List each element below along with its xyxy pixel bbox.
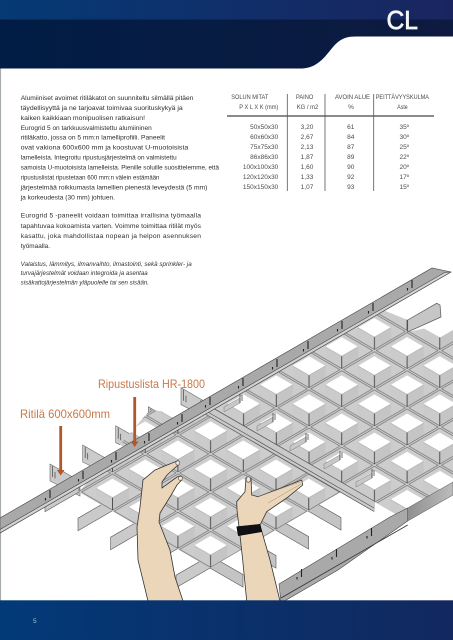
italic note: turvajärjestelmät voidaan integroida ja asentaa [21, 271, 148, 277]
table header: SOLUN MITAT [231, 94, 268, 101]
second paragraph: Eurogrid 5 -paneelit voidaan toimittaa irrallisina työmaalla [21, 213, 201, 220]
table rows: 120x120x30 [243, 174, 279, 181]
table rows: 1,33 [301, 174, 314, 181]
table rows: 20º [399, 164, 410, 171]
upper grid panel [212, 310, 453, 521]
header banner [0, 0, 453, 69]
italic note: sisäkattojärjestelmän yläpuolelle tai sen sisään. [21, 280, 149, 286]
table rows: 84 [347, 134, 355, 141]
table header [231, 93, 430, 111]
table rows: 30º [399, 134, 410, 141]
intro text block: täydellisyyttä ja ne tarjoavat toimivaa suorituskykyä ja [21, 105, 183, 112]
label: grid: Ritilä 600x600mm [20, 407, 110, 421]
lower grid panel [79, 410, 341, 568]
italic note [21, 262, 192, 286]
table rows: 35º [399, 124, 410, 131]
free lamella at top right [408, 303, 441, 332]
intro text block: Alumiiniset avoimet ritiläkatot on suunniteltu silmällä pitäen [21, 95, 194, 102]
icon: wristband [237, 524, 262, 536]
lower suspension rail [279, 508, 408, 603]
table header: P X L X K (mm) [239, 104, 278, 111]
table rows: 2,13 [301, 144, 314, 151]
table header: PEITTÄVYYSKULMA [376, 93, 430, 101]
panel seam strip [200, 400, 374, 512]
table header: AVOIN ALUE [335, 94, 371, 101]
table rows: 61 [347, 124, 355, 131]
lamella ends above rail [50, 388, 211, 496]
second paragraph: tapahtuvaa kokoamista varten. Voimme toimittaa ritilät myös [21, 223, 202, 230]
hanging clips in upper panel [224, 394, 374, 487]
table header: Aste [397, 104, 408, 111]
table rows: 1,87 [301, 154, 314, 161]
table rows: 1,07 [301, 184, 314, 191]
table rows: 150x150x30 [243, 184, 279, 191]
header code CL: CL [386, 5, 418, 35]
intro text block: ja korkeudesta (30 mm) johtuen. [20, 194, 115, 201]
second paragraph: kasattu, joka mahdollistaa nopean ja helpon asennuksen [21, 233, 201, 240]
intro text block: ripustuslistat ripustetaan 600 mm:n välein estämään [21, 174, 160, 181]
table rows: 87 [347, 144, 355, 151]
intro text block: järjestelmää roikkumasta lamellien pienestä leveydestä (5 mm) [20, 184, 207, 191]
label: rail: Ripustuslista HR-1800 [98, 377, 205, 391]
icon: right hand with wristband [237, 477, 303, 601]
left page edge [0, 60, 1, 605]
table header: KG / m2 [297, 104, 319, 111]
table rows [243, 124, 410, 191]
page number: 5 [33, 618, 37, 625]
second paragraph [21, 213, 202, 250]
arrow: rail label [131, 397, 138, 447]
table rows: 100x100x30 [243, 164, 279, 171]
table rows: 86x86x30 [250, 154, 279, 161]
table rows: 2,67 [301, 134, 314, 141]
intro text block [20, 95, 219, 201]
table rows: 22º [399, 154, 410, 161]
table rows: 1,60 [301, 164, 314, 171]
table rows: 92 [347, 174, 355, 181]
table rows: 25º [399, 144, 410, 151]
table rows: 75x75x30 [250, 144, 279, 151]
intro text block: ritiläkatto, jossa on 5 mm:n lamelliprofiili. Paneelit [21, 135, 165, 142]
icon: left hand [137, 461, 183, 601]
footer band [0, 600, 453, 640]
table header: % [348, 104, 354, 111]
arrow: grid label [57, 426, 64, 476]
table header: PAINO [296, 94, 313, 101]
intro text block: samoista U-muotoisista lamelleista. Pienille soluille suosittelemme, että [21, 164, 219, 172]
upper suspension rail [0, 268, 451, 533]
panel side wall [408, 482, 453, 521]
second paragraph: työmaalla. [21, 243, 50, 250]
italic note: Valaistus, lämmitys, ilmanvaihto, ilmastointi, sekä sprinkler- ja [21, 262, 192, 268]
ceiling grid illustration [0, 268, 453, 603]
intro text block: ovat vakiona 600x600 mm ja koostuvat U-muotoisista [21, 145, 189, 152]
table rows: 17º [399, 174, 410, 181]
intro text block: kaiken kaikkiaan monipuolisen ratkaisun! [21, 115, 145, 122]
intro text block: lamelleista. Integroitu ripustusjärjestelmä on valmistettu [21, 155, 177, 162]
table rows: 89 [347, 154, 355, 161]
table rows: 93 [347, 184, 355, 191]
protruding bars, lower panel [45, 480, 374, 588]
table rows: 60x60x30 [250, 134, 279, 141]
table rows: 15º [399, 184, 410, 191]
intro text block: Eurogrid 5 on tarkkuusvalmistettu alumiininen [21, 125, 152, 132]
specification table [227, 93, 434, 191]
table rows: 3,20 [301, 124, 314, 131]
table rows: 50x50x30 [250, 124, 279, 131]
table rows: 90 [347, 164, 355, 171]
